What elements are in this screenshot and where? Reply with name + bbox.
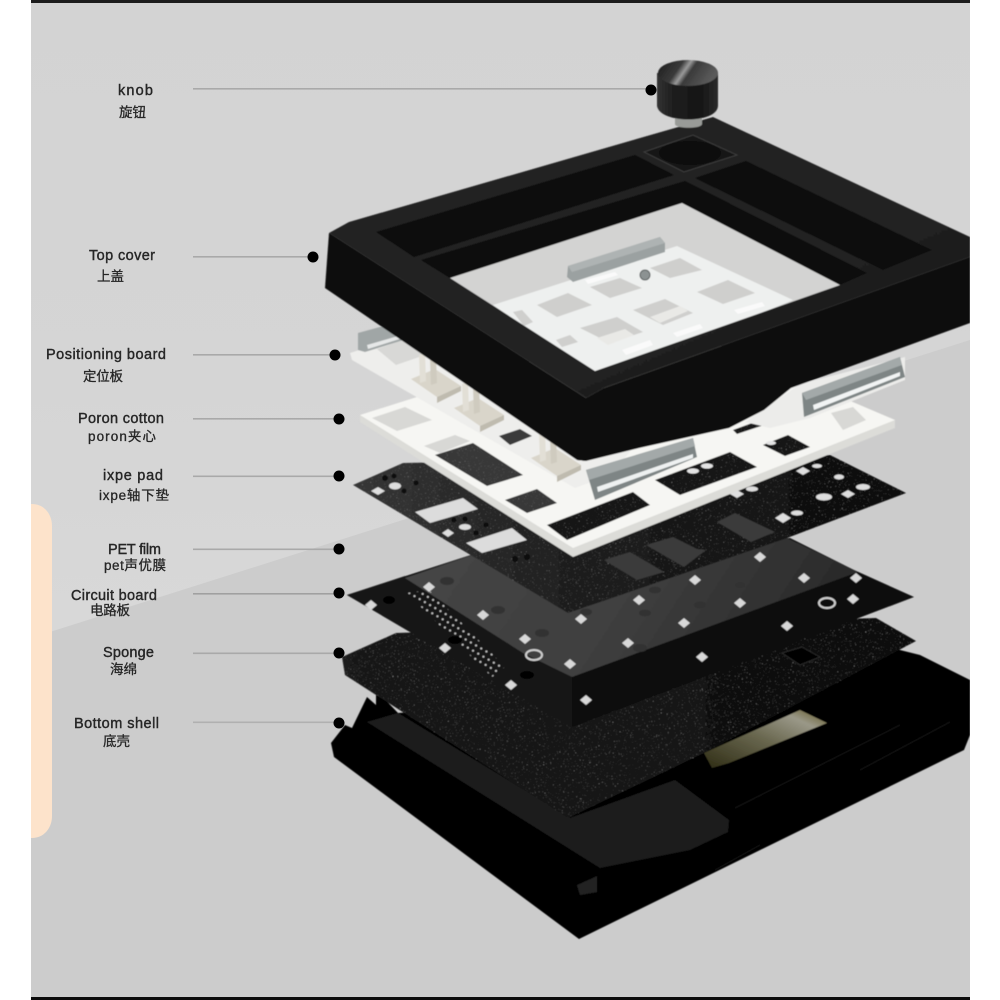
battery window — [704, 710, 827, 768]
label: positioning board: Positioning board — [46, 347, 166, 363]
label: top cover: Top cover — [89, 248, 155, 264]
bottom dark edge strip — [31, 997, 970, 1000]
white slots — [585, 272, 765, 355]
inner recess — [421, 181, 867, 285]
label: sponge: Sponge — [103, 645, 154, 661]
leader: ixpe pad — [193, 470, 344, 482]
plate light window — [377, 340, 425, 365]
label: poron cotton: Poron cotton — [78, 411, 164, 427]
label: PET film — [104, 542, 166, 573]
label: positioning board — [46, 347, 166, 384]
label: bottom shell — [74, 716, 159, 749]
switch pins row — [411, 353, 581, 482]
frame light openings — [372, 407, 866, 453]
knob top — [658, 60, 718, 86]
leader: top cover — [193, 252, 318, 262]
leader: poron cotton — [193, 414, 344, 424]
ixpe dark dots — [382, 474, 530, 562]
screw — [640, 270, 650, 280]
label: bottom shell: 底壳 — [103, 734, 130, 749]
peach side tab — [31, 504, 52, 838]
label: circuit board: Circuit board — [71, 588, 157, 604]
exploded keyboard illustration — [325, 60, 970, 939]
layer: bottom shell — [331, 640, 970, 939]
layer: poron cotton frame — [360, 346, 895, 558]
ixpe cut-outs — [371, 464, 870, 537]
plate right strip — [745, 357, 905, 428]
frame pads showing through — [435, 443, 557, 513]
leader: circuit board — [193, 588, 344, 598]
frame pad holes — [687, 441, 776, 474]
label: knob: 旋钮 — [119, 105, 146, 120]
plate window showing pad — [499, 429, 532, 445]
leader: knob — [193, 84, 656, 96]
right stabiliser bar — [802, 357, 905, 417]
leader: bottom shell — [193, 718, 344, 728]
label: poron cotton — [78, 411, 164, 444]
knob body — [657, 73, 718, 120]
slot upper left — [376, 155, 674, 257]
cover opening — [450, 203, 840, 371]
shell inner wall — [367, 713, 729, 868]
label: ixpe pad: ixpe pad — [103, 468, 163, 484]
label: PET film: pet声优膜 — [104, 558, 166, 573]
knob — [657, 60, 718, 128]
pcb dark round pads — [440, 577, 660, 653]
label: top cover: 上盖 — [97, 269, 124, 284]
label: top cover — [89, 248, 155, 284]
front stabiliser bar — [586, 438, 697, 500]
layer: positioning board — [350, 320, 905, 488]
plate seen through opening — [493, 237, 793, 380]
label: ixpe pad — [99, 468, 170, 503]
knob neck — [675, 112, 702, 128]
label: knob — [118, 83, 153, 120]
top dark edge strip — [31, 0, 970, 3]
pcb left band — [347, 576, 572, 727]
label: poron cotton: poron夹心 — [88, 429, 156, 444]
slot upper right — [695, 161, 932, 270]
layer: ixpe pad — [353, 455, 906, 613]
label: knob: knob — [118, 83, 153, 99]
knob socket — [644, 135, 737, 172]
label: sponge: 海绵 — [110, 662, 137, 677]
shell inner lines — [715, 722, 950, 870]
pcb pads — [365, 552, 862, 705]
leader: sponge — [193, 648, 344, 658]
label: PET film: PET film — [108, 542, 161, 558]
switch cut-outs — [513, 258, 755, 347]
pcb dot grid — [407, 590, 505, 677]
ixpe light slots — [415, 498, 527, 553]
ixpe grey windows — [604, 513, 775, 580]
cover right side — [577, 257, 970, 461]
lighter inner cut-outs — [597, 306, 688, 345]
label: circuit board — [71, 588, 157, 618]
left stabiliser bar — [358, 326, 402, 352]
leader: PET film — [193, 544, 344, 554]
leader: positioning board — [193, 350, 340, 360]
label: positioning board: 定位板 — [83, 369, 124, 384]
label: sponge — [103, 645, 154, 677]
rear stabiliser bar — [567, 237, 665, 282]
layer: circuit board — [347, 538, 914, 727]
sponge notch — [782, 647, 820, 665]
label: circuit board: 电路板 — [90, 603, 130, 618]
cover left side — [325, 233, 604, 461]
pcb mounting rings — [526, 598, 835, 660]
layer: sponge — [342, 618, 916, 818]
top cover — [325, 117, 970, 461]
cover top surface — [329, 117, 970, 398]
label: ixpe pad: ixpe轴下垫 — [99, 488, 170, 503]
pcb grey area — [405, 538, 858, 677]
label: bottom shell: Bottom shell — [74, 716, 159, 732]
